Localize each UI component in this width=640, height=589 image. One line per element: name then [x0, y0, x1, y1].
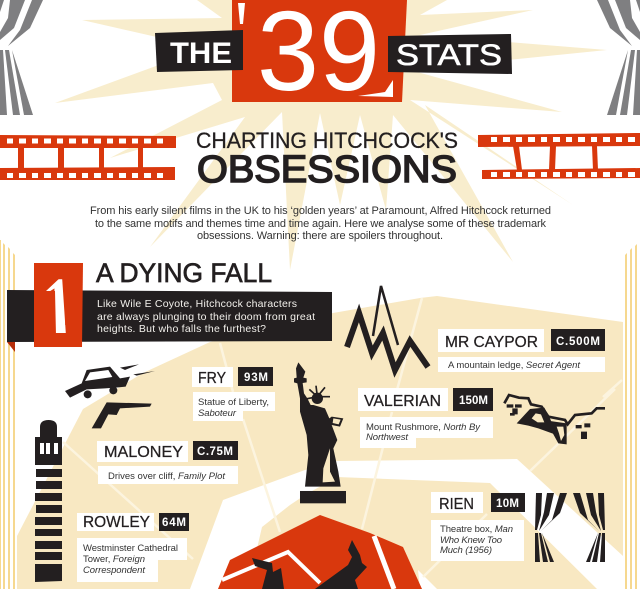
intro paragraph: obsessions. Warning: there are spoilers throughout.	[197, 230, 443, 242]
label: maloney: Drives over cliff, Family Plot	[108, 471, 225, 482]
label: fry: Statue of Liberty,	[198, 397, 269, 408]
label: rien: Theatre box, Man	[440, 524, 513, 535]
label: rien: Who Knew Too	[440, 535, 502, 546]
section description: are always plunging to their doom from great	[97, 311, 315, 323]
icon: mountain	[347, 286, 428, 370]
cream map area	[17, 296, 623, 589]
intro paragraph: From his early silent films in the UK to his ‘golden years’ at Paramount, Alfred Hitchcock returned	[90, 205, 551, 217]
white road	[190, 459, 623, 589]
title: STATS	[388, 34, 512, 74]
section description: heights. But who falls the furthest?	[97, 323, 266, 335]
curtain: top left	[0, 0, 43, 115]
label: valerian	[358, 388, 493, 448]
icon: gun	[92, 402, 152, 428]
label: rien: Much (1956)	[440, 545, 492, 556]
label: maloney: C.75M	[197, 446, 233, 458]
label: mr caypor: C.500M	[556, 336, 600, 348]
label: rowley: 64M	[162, 517, 186, 529]
title: THE: THE	[170, 37, 232, 70]
label: rowley	[77, 513, 189, 582]
label: valerian: Mount Rushmore, North By	[366, 422, 481, 433]
label: fry: FRY	[198, 370, 226, 387]
icon: theatre curtains	[535, 493, 605, 562]
side stripes: right	[625, 244, 637, 589]
section description: Like Wile E Coyote, Hitchcock characters	[97, 298, 297, 310]
side stripes: left	[0, 240, 15, 589]
section banner	[7, 290, 332, 352]
section description	[97, 298, 315, 335]
label: mr caypor: A mountain ledge, Secret Agent	[448, 360, 580, 371]
label: rien	[431, 492, 525, 561]
label: fry	[192, 367, 275, 421]
icon: mount rushmore	[504, 395, 605, 444]
heading: charting hitchcock's: CHARTING HITCHCOCK'S	[196, 128, 458, 153]
icon: westminster cathedral tower	[35, 420, 62, 582]
label: maloney	[97, 441, 238, 484]
label: rowley: ROWLEY	[83, 514, 150, 531]
sunburst background	[55, 0, 607, 270]
icon: statue of liberty	[294, 362, 346, 503]
label: fry: 93M	[244, 372, 268, 384]
label: valerian: Northwest	[366, 432, 408, 443]
curtain: top right	[597, 0, 640, 115]
title red block with 39	[232, 0, 407, 114]
intro paragraph: to the same motifs and themes time and time again. Here we analyse some of these trademark	[95, 218, 546, 230]
section heading: A DYING FALL	[96, 258, 272, 288]
label: fry: Saboteur	[198, 408, 237, 419]
intro paragraph	[90, 205, 551, 242]
label: mr caypor	[438, 329, 605, 372]
label: rien: 10M	[496, 498, 519, 510]
label: rien: RIEN	[439, 496, 474, 513]
label: valerian: VALERIAN	[364, 393, 441, 410]
icon: car	[65, 364, 155, 398]
film strip: right	[478, 133, 640, 179]
film strip: left	[0, 135, 176, 180]
label: rowley: Tower, Foreign	[83, 554, 145, 565]
label: rowley: Correspondent	[83, 565, 145, 576]
title: THE	[155, 30, 243, 72]
label: rowley: Westminster Cathedral	[83, 543, 178, 554]
label: maloney: MALONEY	[104, 444, 183, 461]
section number block: 1	[36, 262, 80, 350]
heading: obsessions: OBSESSIONS	[197, 149, 457, 191]
label: valerian: 150M	[459, 395, 488, 407]
falling figure on red hexagon	[218, 515, 422, 589]
label: mr caypor: MR CAYPOR	[445, 334, 538, 351]
pale map lines	[63, 298, 622, 577]
title: STATS: STATS	[396, 39, 502, 72]
